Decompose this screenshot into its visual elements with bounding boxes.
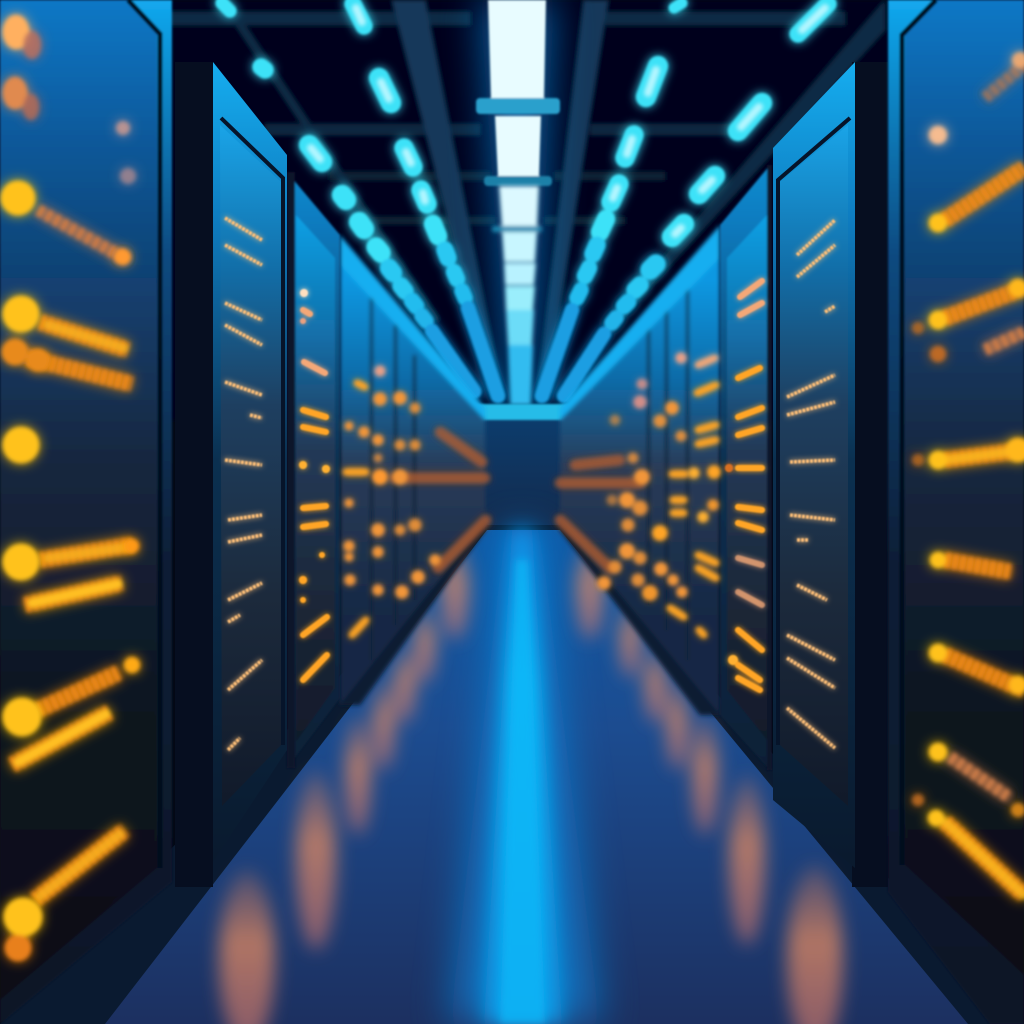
rack 1 left: [0, 0, 172, 1024]
LEDs: rack 3 left: [299, 289, 330, 680]
ceiling light pills: [222, 3, 828, 396]
LEDs: rack 2 left: [225, 218, 262, 750]
LEDs: rack 1 left dots: [1, 15, 140, 961]
far racks left: [340, 235, 485, 705]
LEDs: rack 1 right: [912, 52, 1024, 895]
rack 3 right: [720, 165, 772, 770]
LEDs: rack 3 right: [725, 281, 762, 690]
far racks right: [560, 225, 720, 715]
LEDs: rack 2 right: [787, 220, 835, 748]
floor reflections: amber light: [219, 540, 843, 1024]
ceiling light strip: centre: [476, 0, 560, 405]
back wall: [470, 404, 572, 535]
LEDs: far racks left: [344, 366, 486, 635]
LEDs: far racks right: [560, 353, 699, 617]
rack 3 left: [287, 172, 340, 768]
LEDs: rack 4 right: [697, 358, 720, 635]
LEDs: rack 1 left dashes: [12, 210, 132, 900]
ceiling pill highlights: [311, 8, 825, 234]
rack 1 right: [888, 0, 1024, 1024]
ceiling: [0, 0, 1024, 420]
rack 2 left: [175, 62, 287, 887]
rack 2 right: [773, 62, 888, 887]
floor: [0, 525, 1024, 1024]
